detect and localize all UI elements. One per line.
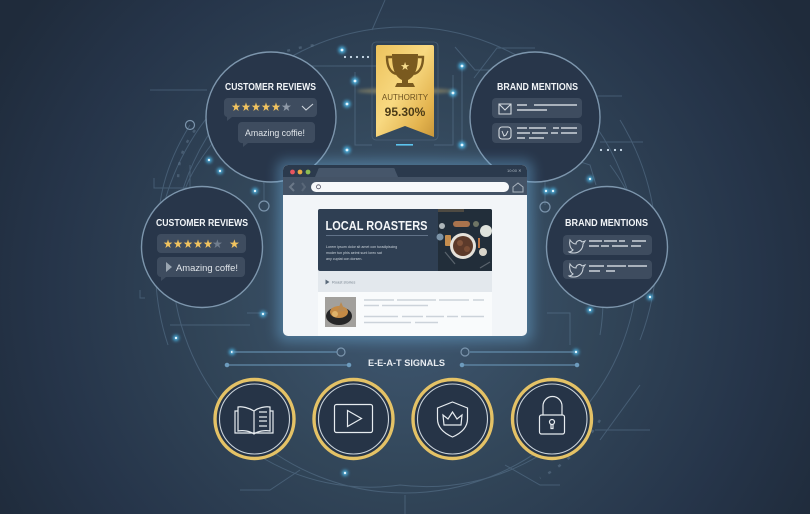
- icon: trophy: ★: [400, 61, 410, 73]
- hero body text: any cuptat con dorsen.: [326, 257, 362, 261]
- rating card left: ★: [212, 237, 223, 251]
- article thumbnail: [325, 297, 356, 327]
- hero title: LOCAL ROASTERS: [326, 219, 428, 233]
- browser title bar: 10:00 ✕: [507, 168, 521, 173]
- panel: customer reviews top: [206, 52, 336, 182]
- circuit network lines: [140, 0, 657, 514]
- signal: shield: [413, 380, 492, 458]
- panel: browser window: [283, 165, 527, 336]
- icon: open book: [235, 407, 273, 434]
- signal: lock: [512, 380, 592, 458]
- panel: brand mentions right: [546, 186, 668, 308]
- signal: book: [215, 380, 294, 458]
- section band: [318, 271, 492, 292]
- hero banner: [318, 209, 492, 271]
- heading: brand mentions right: BRAND MENTIONS: [565, 218, 648, 229]
- mention card: social: [492, 123, 582, 143]
- small node rings: [186, 120, 550, 356]
- panel: brand mentions top: [470, 52, 600, 182]
- heading: E-E-A-T signals: E-E-A-T SIGNALS: [368, 358, 445, 369]
- heading: brand mentions top: BRAND MENTIONS: [497, 82, 578, 93]
- mention card: twitter one: [563, 235, 652, 255]
- panel: customer reviews left: [142, 186, 262, 308]
- article card: [318, 292, 492, 336]
- signal: video: [314, 380, 393, 458]
- label: authority: AUTHORITY: [382, 93, 429, 102]
- value: 95.30%: 95.30%: [385, 105, 426, 119]
- icon: shield crown: [438, 402, 468, 437]
- hero food photo: [436, 209, 492, 271]
- mention card: email: [492, 98, 582, 118]
- rating card top: ★: [281, 100, 292, 114]
- heading: customer reviews top: CUSTOMER REVIEWS: [225, 82, 316, 93]
- rating card top: ★★★★★: [231, 100, 281, 114]
- icon: play: [334, 404, 372, 432]
- comment bubble top: Amazing coffie!: [245, 128, 305, 139]
- icon: padlock: [540, 396, 564, 434]
- glowing nodes: [173, 46, 653, 476]
- browser toolbar: [283, 177, 527, 195]
- hero body text: Lorem ipsum dolor sit amet con turadipiscing: [326, 245, 397, 249]
- comment bubble left: Amazing coffe!: [176, 263, 238, 274]
- rating card left: ★★★★★: [163, 237, 213, 251]
- rating card top: [224, 98, 317, 121]
- heading: customer reviews left: CUSTOMER REVIEWS: [156, 218, 248, 229]
- rating card left: ★: [229, 237, 240, 251]
- dashed arcs: [178, 45, 600, 478]
- rating card left: [157, 234, 246, 253]
- signal divider lines: [225, 352, 579, 367]
- panel: authority badge: [357, 42, 453, 140]
- browser title bar: [283, 165, 527, 177]
- article text lines: [364, 300, 484, 322]
- hero body text: [326, 245, 397, 261]
- mention card: twitter two: [563, 260, 652, 279]
- section band: Roast stories: [332, 280, 355, 284]
- dot rows: [344, 56, 622, 151]
- browser glow: [277, 160, 533, 342]
- hero body text: moder tun phis aeimt sunt lorec sat: [326, 251, 382, 255]
